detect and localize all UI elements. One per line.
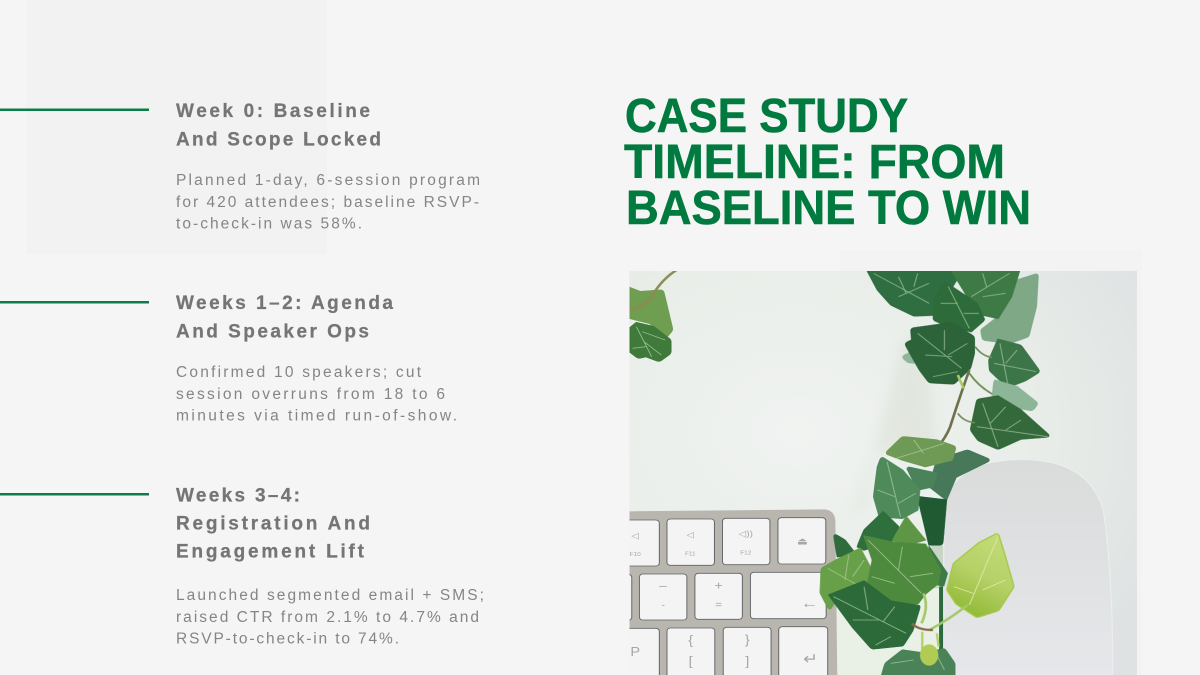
photo: ivy vine over keyboard and mouse bbox=[615, 268, 1137, 675]
timeline item: weeks 3-4 bbox=[0, 486, 484, 648]
keyboard: – bbox=[659, 578, 668, 592]
keyboard: } bbox=[745, 633, 750, 647]
timeline item: weeks 1-2: minutes via timed run-of-show. bbox=[176, 408, 457, 424]
panel: faint backdrop behind first timeline item bbox=[27, 0, 327, 254]
keyboard: F10 bbox=[630, 551, 641, 558]
timeline item: weeks 3-4: Engagement Lift bbox=[176, 542, 365, 562]
timeline item: weeks 1-2: session overruns from 18 to 6 bbox=[176, 386, 445, 403]
title: TIMELINE: FROM bbox=[624, 136, 1005, 189]
timeline item: week 0: And Scope Locked bbox=[176, 130, 381, 150]
timeline item: week 0: to-check-in was 58%. bbox=[176, 216, 362, 232]
timeline item: week 0 bbox=[0, 101, 480, 232]
keyboard: ↵ bbox=[803, 651, 818, 668]
lower ivy cluster bbox=[820, 437, 1014, 675]
keyboard: P bbox=[630, 645, 640, 659]
timeline item: week 0: Week 0: Baseline bbox=[176, 101, 370, 122]
timeline item: weeks 3-4: raised CTR from 2.1% to 4.7% and bbox=[176, 609, 479, 626]
keyboard: ◁ bbox=[631, 531, 639, 540]
timeline item: weeks 3-4: RSVP-to-check-in to 74%. bbox=[176, 630, 399, 648]
title: BASELINE TO WIN bbox=[626, 182, 1031, 235]
title bbox=[624, 90, 1031, 235]
keyboard: ] bbox=[745, 654, 749, 668]
top-left ivy sprig bbox=[630, 286, 673, 362]
keyboard bbox=[615, 509, 837, 675]
timeline item: weeks 1-2: And Speaker Ops bbox=[176, 322, 369, 342]
keyboard: ⏏ bbox=[797, 536, 808, 547]
keyboard: F12 bbox=[740, 550, 752, 557]
mouse bbox=[931, 460, 1113, 675]
timeline item: week 0: for 420 attendees; baseline RSVP- bbox=[176, 194, 479, 211]
timeline item: week 0: Planned 1-day, 6-session program bbox=[176, 172, 480, 189]
upper ivy cluster bbox=[866, 268, 1051, 449]
title: CASE STUDY bbox=[625, 90, 908, 143]
keyboard: ← bbox=[801, 595, 819, 612]
timeline item: weeks 1-2 bbox=[0, 293, 457, 424]
keyboard: F11 bbox=[685, 551, 696, 557]
timeline item: weeks 3-4: Launched segmented email + SMS; bbox=[176, 587, 484, 604]
keyboard: { bbox=[688, 634, 694, 647]
keyboard: + bbox=[715, 578, 723, 592]
timeline item: weeks 1-2: Weeks 1–2: Agenda bbox=[176, 293, 393, 314]
timeline item: weeks 1-2: Confirmed 10 speakers; cut bbox=[176, 364, 422, 381]
keyboard: ◁)) bbox=[739, 529, 753, 539]
panel: faint backdrop behind photo bbox=[840, 250, 1142, 675]
keyboard: [ bbox=[689, 654, 693, 668]
upper ivy stems bbox=[623, 270, 992, 448]
lower ivy stems and bud bbox=[912, 593, 967, 666]
keyboard: = bbox=[715, 600, 722, 611]
keyboard: ◁ bbox=[686, 530, 694, 539]
timeline item: weeks 3-4: Registration And bbox=[176, 514, 370, 534]
timeline item: weeks 3-4: Weeks 3–4: bbox=[176, 486, 300, 506]
keyboard: - bbox=[661, 601, 665, 611]
